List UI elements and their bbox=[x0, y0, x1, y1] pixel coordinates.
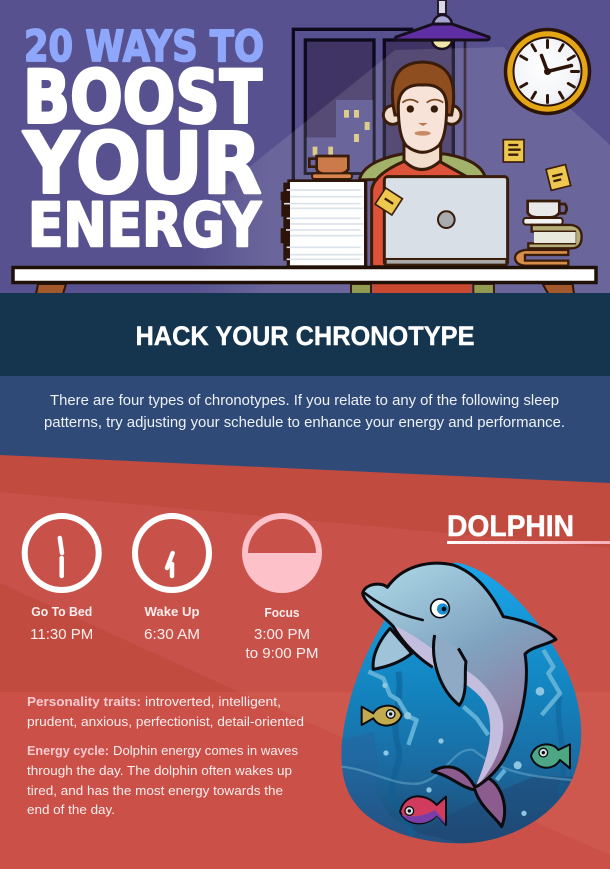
paper stack bbox=[281, 179, 367, 267]
sticky note on wall bbox=[503, 140, 524, 162]
label: focus: 3:00 PM bbox=[254, 627, 310, 643]
heading: HACK YOUR CHRONOTYPE bbox=[136, 321, 474, 351]
illustration: person at desk bbox=[281, 62, 582, 294]
face bbox=[398, 85, 447, 152]
dolphin mouth bbox=[365, 593, 423, 620]
sticky note on laptop bbox=[375, 188, 402, 215]
title: ENERGY bbox=[28, 190, 262, 261]
text: energy cycle bbox=[27, 743, 298, 817]
tail flukes bbox=[432, 767, 505, 827]
label: focus: to 9:00 PM bbox=[246, 646, 318, 662]
panel: dolphin chronotype bbox=[0, 455, 610, 869]
text: energy cycle: Energy cycle: bbox=[27, 743, 109, 758]
illustration: window with night city bbox=[293, 29, 465, 180]
fish: yellow bbox=[362, 706, 402, 726]
laptop bbox=[384, 177, 508, 265]
intro text bbox=[44, 393, 565, 431]
title: YOUR bbox=[23, 114, 262, 212]
intro text: There are four types of chronotypes. If you relate to any of the following sleep bbox=[50, 393, 559, 409]
header background bbox=[0, 0, 610, 294]
label: wake up bbox=[144, 604, 200, 643]
icon: focus half circle bbox=[242, 513, 322, 593]
neck bbox=[404, 142, 441, 169]
text: personality traits: prudent, anxious, perfectionist, detail-oriented bbox=[27, 714, 304, 729]
books and white cup bbox=[515, 201, 582, 266]
label: go to bed bbox=[30, 604, 93, 643]
seaweed bbox=[392, 672, 412, 837]
water blob bbox=[341, 563, 581, 843]
dolphin eye bbox=[431, 599, 449, 618]
facial features bbox=[402, 100, 443, 136]
section background: hack your chronotype bbox=[0, 293, 610, 376]
heading: dolphin: DOLPHIN bbox=[447, 510, 574, 543]
text: energy cycle: tired, and has the most energy towards the bbox=[27, 783, 283, 798]
icon: wake up clock bbox=[135, 516, 209, 590]
fish: green bbox=[531, 744, 570, 768]
ripples bbox=[368, 650, 560, 780]
chair legs and body under desk bbox=[351, 284, 574, 294]
seabed shapes bbox=[341, 732, 462, 843]
coffee cup on papers bbox=[309, 156, 352, 179]
hair bbox=[392, 62, 454, 115]
label: go to bed: Go To Bed bbox=[31, 604, 92, 619]
title: BOOST bbox=[23, 56, 262, 140]
back flipper bbox=[373, 628, 412, 669]
label: focus: Focus bbox=[264, 605, 300, 620]
torso bbox=[372, 162, 467, 267]
label: focus bbox=[246, 605, 318, 662]
front flipper bbox=[434, 635, 466, 705]
text: personality traits: introverted, intelligent, bbox=[145, 694, 281, 709]
label: wake up: Wake Up bbox=[144, 604, 200, 619]
icon: go to bed clock bbox=[25, 516, 99, 590]
panel: intro bbox=[0, 376, 610, 488]
fish: red and purple bbox=[400, 796, 446, 825]
desk bbox=[13, 268, 596, 294]
icon: hanging lamp bbox=[395, 0, 489, 49]
label: go to bed: 11:30 PM bbox=[30, 627, 93, 643]
text: energy cycle: end of the day. bbox=[27, 802, 115, 817]
text: energy cycle: through the day. The dolphin often wakes up bbox=[27, 763, 292, 778]
title: 20 WAYS TO bbox=[24, 22, 264, 72]
dolphin outline bbox=[363, 563, 556, 787]
dolphin body fill bbox=[363, 563, 556, 787]
intro text: patterns, try adjusting your schedule to enhance your energy and performance. bbox=[44, 415, 565, 431]
illustration: dolphin underwater bbox=[341, 563, 581, 843]
title bbox=[23, 22, 264, 261]
falling sticky note bbox=[546, 165, 571, 190]
text: personality traits bbox=[27, 694, 304, 729]
chair back bbox=[359, 154, 485, 180]
icon: wall clock bbox=[506, 30, 590, 114]
ears bbox=[383, 106, 402, 124]
text: personality traits: Personality traits: bbox=[27, 694, 141, 709]
dolphin belly bbox=[395, 626, 503, 787]
bubbles bbox=[382, 683, 544, 816]
lamp light cone bbox=[100, 47, 610, 294]
label: wake up: 6:30 AM bbox=[144, 627, 200, 643]
text: energy cycle: Dolphin energy comes in waves bbox=[113, 743, 298, 758]
